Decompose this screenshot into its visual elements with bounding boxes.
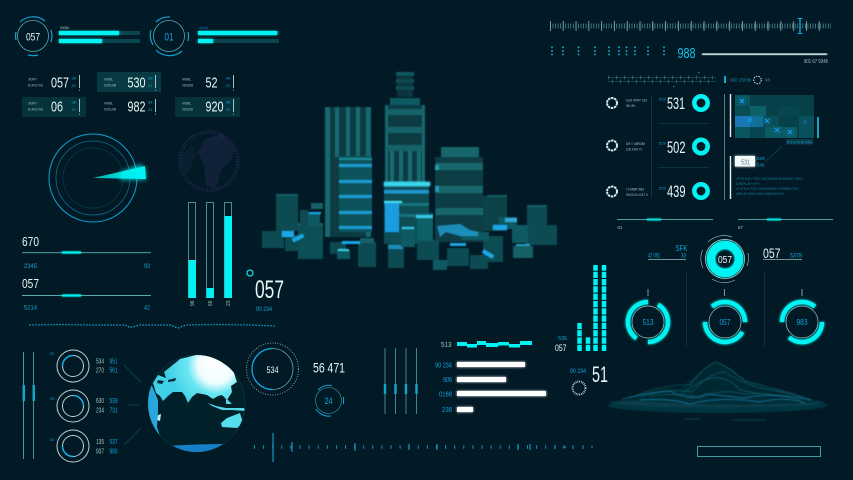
readout 057: 057: [255, 276, 284, 304]
stat rows 531 502 439: LDE KOH.72: [626, 146, 643, 152]
header 057 5378: 057: [763, 245, 781, 261]
gauge 24: [316, 385, 344, 416]
panel: stat table: 21: [148, 107, 153, 112]
header SFK: 42 092: [648, 254, 660, 260]
dotted indicator row with 988: [552, 45, 828, 65]
dotted wave: [30, 324, 275, 328]
ring rows: 937: [96, 448, 104, 456]
tower 2: [384, 72, 430, 244]
horizontal bar chart: 513: [441, 340, 452, 349]
ring rows: 731: [110, 408, 118, 414]
segmented level bars: 057: [555, 343, 566, 353]
vertical bar chart: 66: [208, 300, 214, 306]
stat rows 531 502 439: 529: [659, 140, 666, 146]
gauge 534: [246, 343, 298, 395]
heat map: [735, 95, 814, 138]
panel: top gauge 01: 01: [164, 32, 174, 44]
dotted indicator row with 988: 988: [678, 45, 696, 62]
vertical bar chart: 96: [190, 300, 196, 306]
map panel: 531: [741, 158, 750, 166]
header 057 5378: [763, 245, 803, 261]
stat rows 531 502 439: 529: [659, 186, 666, 190]
ring rows: 561: [110, 368, 118, 374]
stat rows 531 502 439: 531: [667, 94, 685, 113]
tower 3: [435, 147, 507, 242]
stat rows 531 502 439: SK.89: [626, 103, 636, 108]
divider sliders 01 / 67: 01: [618, 225, 623, 230]
stat rows 531 502 439: 502: [667, 138, 686, 157]
ring rows: 534: [96, 358, 104, 366]
panel: stat table: HXMEL: [104, 100, 114, 106]
header SFK: [648, 244, 688, 260]
map panel: 529: [757, 156, 765, 161]
ring gauge 983: 983: [796, 318, 808, 327]
ring rows: 234: [96, 408, 104, 414]
progress: 670: [22, 234, 151, 270]
divider sliders 01 / 67: 67: [738, 225, 744, 230]
panel: stat table: 920: [206, 98, 224, 116]
header SFK: 33: [681, 254, 686, 260]
ring rows: 135: [96, 439, 104, 446]
panel: stat table: B UHCO RG: [28, 106, 43, 112]
vertical bar chart: 23: [226, 300, 232, 306]
sliders: [22, 352, 35, 459]
ring rows: 630: [96, 398, 104, 405]
panel: stat table: 98: [148, 100, 153, 104]
stat rows 531 502 439: I 0 MBR 5B3: [626, 186, 645, 192]
panel: stat table: 530: [128, 74, 146, 92]
map panel: <P STYLE="TEXT-DECORATION:NONE;">TEXT: [736, 177, 804, 181]
top ruler: [550, 18, 831, 34]
ring rows: 270: [96, 368, 104, 374]
map panel: DISPLAY NONE ON ALL WINDOWS</P>: [736, 192, 785, 196]
radar: [49, 134, 146, 222]
progress: 670: 670: [22, 234, 39, 249]
panel: stat table: 98: [226, 76, 231, 80]
progress: 670: 93: [144, 263, 150, 270]
ring gauge 513: [628, 289, 668, 342]
panel: stat table: XZSUIB: [104, 106, 116, 112]
glowing highlights: [282, 201, 530, 259]
ring rows: 31: [50, 437, 55, 442]
header SFK: SFK: [676, 244, 688, 253]
tower 1: [325, 107, 372, 237]
stat rows 531 502 439: DR Y. MIRDIM: [626, 141, 645, 146]
panel: stat table: HXMEL: [104, 76, 114, 82]
map panel: [724, 76, 819, 200]
purple dotted globe: [179, 131, 239, 191]
main donut gauge 057: [701, 236, 749, 283]
gauge 534: 534: [266, 365, 278, 376]
horizontal bar chart: 238: [442, 405, 452, 414]
panel: top left gauge 057: [16, 17, 140, 56]
ring gauge 983: [782, 289, 822, 342]
progress: 057: 057: [22, 276, 39, 291]
map panel: 0067 1258 B9: [730, 78, 751, 82]
panel: stat table: 21: [226, 107, 231, 112]
gauge 24: 24: [324, 396, 332, 406]
progress: 670: 2345: [24, 263, 37, 270]
small blocks: [262, 194, 557, 270]
progress: 057: 5214: [24, 304, 37, 312]
map panel: DISPLAY</P>: [736, 182, 761, 186]
stat rows 531 502 439: UZH KKPF 163: [626, 98, 648, 102]
vertical sliders: [385, 348, 416, 414]
panel: stat table: XESUIB: [182, 82, 193, 88]
ring rows: 951: [110, 358, 118, 366]
map panel: RTZ JU IN SH KING: [787, 140, 812, 144]
panel: stat table: B UHCO RG: [28, 82, 43, 88]
panel: stat table: 982: [128, 98, 146, 116]
ring rows: [50, 350, 141, 462]
ring gauge 057: 057: [720, 318, 731, 327]
divider sliders 01 / 67: [617, 218, 833, 230]
progress frame: [698, 446, 820, 456]
map panel: <P STYLE="TEXT-DESIGN:NONE">KERNING TEXT: [736, 187, 799, 191]
panel: top left gauge 057: 00058: [60, 25, 70, 30]
panel: top gauge 01: [150, 17, 279, 56]
panel: stat table: [22, 72, 240, 117]
readout 057: 90 234: [256, 306, 272, 313]
stat rows 531 502 439: 439: [667, 182, 686, 201]
panel: stat table: 21: [72, 83, 77, 88]
panel: stat table: HXMEL: [182, 76, 192, 82]
panel: stat table: XESUIB: [182, 106, 193, 112]
small ruler: [608, 72, 716, 86]
panel: top gauge 01: 0043: [199, 25, 209, 30]
segmented level bars: 536: [558, 336, 567, 342]
panel: stat table: SKXRY: [28, 76, 37, 82]
panel: stat table: 98: [226, 100, 231, 104]
panel: earth with linked rings: [22, 350, 245, 462]
readout 56 471: 56 471: [313, 360, 345, 376]
panel: stat table: HXMEL: [182, 100, 192, 106]
panel: stat table: 057: [51, 74, 69, 92]
map panel: 540: [757, 162, 765, 168]
readout 51: 51: [592, 362, 608, 387]
panel: top left gauge 057: 057: [26, 32, 40, 44]
ring rows: 980: [110, 448, 118, 456]
ring gauge 513: 513: [642, 318, 654, 327]
header 057 5378: 5378: [790, 254, 803, 260]
panel: stat table: SKXRY: [28, 100, 37, 106]
panel: stat table: 52: [206, 74, 218, 92]
horizontal bar chart: 90 234: [435, 360, 452, 370]
globe: [147, 354, 245, 456]
panel: stat table: 21: [72, 107, 77, 112]
readout 057: [247, 270, 284, 313]
tick timeline: [254, 433, 592, 462]
map panel: 98: [765, 78, 771, 82]
city illustration: [262, 72, 557, 270]
panel: stat table: 21: [226, 83, 231, 88]
horizontal bar chart: 0168: [439, 390, 452, 398]
panel: stat table: 06: [51, 98, 63, 116]
terrain mesh: [608, 362, 827, 420]
panel: stat table: 21: [148, 83, 153, 88]
panel: stat table: 98: [72, 76, 77, 80]
stat rows 531 502 439: SK0219 LG4T V: [626, 192, 648, 197]
ring rows: 37: [50, 351, 55, 356]
segmented level bars: [555, 265, 604, 353]
readout 51: [570, 362, 608, 394]
panel: stat table: 98: [148, 76, 153, 80]
progress: 057: 42: [144, 304, 150, 312]
horizontal bar chart: [435, 340, 546, 414]
stat rows 531 502 439: 529: [659, 96, 666, 102]
readout 51: 90 234: [570, 368, 586, 375]
dotted indicator row with 988: 901 67 9345: [804, 59, 828, 65]
ring rows: 29: [50, 396, 55, 401]
ring gauge 057: [705, 289, 745, 342]
progress: 057: [22, 276, 151, 312]
ring rows: 539: [110, 398, 118, 405]
panel: stat table: 98: [72, 100, 77, 104]
main donut gauge 057: 057: [718, 255, 732, 266]
horizontal bar chart: 906: [443, 375, 452, 384]
stat rows 531 502 439: [607, 94, 709, 201]
vertical bar chart: [188, 202, 232, 306]
panel: stat table: XZSUIB: [104, 82, 116, 88]
ring rows: 537: [110, 439, 118, 446]
